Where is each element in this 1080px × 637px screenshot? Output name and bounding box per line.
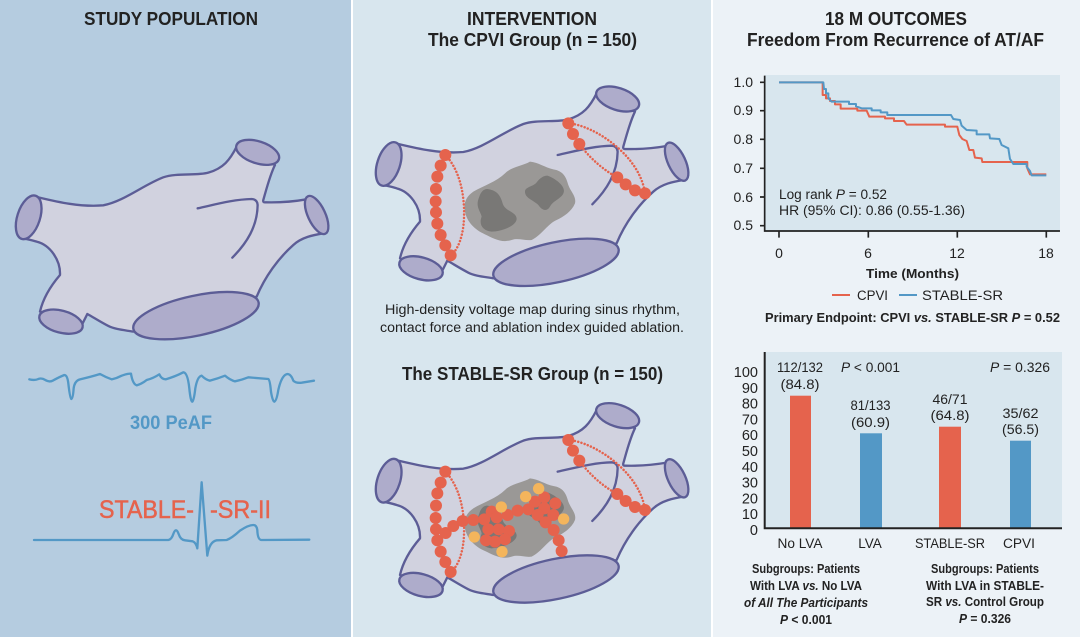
note: LVA vs no LVA: of All The Participants: [744, 595, 868, 610]
caption: voltage map: High-density voltage map during sinus rhythm,: [385, 302, 680, 317]
curve: STABLE-SR: [779, 82, 1046, 175]
bar: No LVA: [777, 359, 823, 528]
legend: STABLE-SR: [922, 288, 1003, 303]
label: STABLE-SR-II: STABLE-: [99, 496, 194, 524]
axes: [760, 76, 1060, 238]
legend: [832, 288, 1003, 303]
y axis labels: 0.8: [734, 131, 753, 147]
note: LVA vs no LVA: P < 0.001: [780, 612, 832, 627]
bar: No LVA: 112/132: [777, 359, 823, 375]
y axis labels: 30: [742, 476, 758, 492]
x axis labels: 0: [775, 245, 783, 261]
bar: LVA: [850, 397, 891, 528]
bar: STABLE-SR: (64.8): [930, 407, 970, 423]
caption: voltage map: [380, 302, 684, 335]
illustration: STABLE-SR ablation: [371, 398, 693, 612]
x axis labels: 12: [949, 245, 965, 261]
primary endpoint note: Primary Endpoint: CPVI vs. STABLE-SR P = 0.52: [765, 310, 1060, 325]
y axis labels: [734, 74, 753, 233]
bar: CPVI: 35/62: [1002, 405, 1039, 421]
y axis labels: 0.9: [734, 102, 753, 118]
caption: voltage map: contact force and ablation index guided ablation.: [380, 320, 684, 335]
category labels: [778, 536, 1035, 551]
heading: STABLE-SR group: The STABLE-SR Group (n = 150): [402, 364, 663, 384]
note: LVA vs no LVA: Subgroups: Patients: [752, 561, 860, 576]
note: STABLE-SR vs control: With LVA in STABLE-: [926, 578, 1044, 593]
log rank statistics: Log rank P = 0.52: [779, 187, 887, 202]
y axis labels: 0.7: [734, 160, 753, 176]
category labels: CPVI: [1003, 536, 1035, 551]
y axis labels: 0.5: [734, 217, 753, 233]
legend: CPVI: [857, 288, 888, 303]
note: STABLE-SR vs control: Subgroups: Patients: [931, 561, 1039, 576]
x axis title: Time (Months): [866, 266, 959, 281]
note: LVA vs no LVA: With LVA vs. No LVA: [750, 578, 863, 593]
note: LVA vs no LVA: [744, 561, 868, 627]
y axis labels: 40: [742, 460, 758, 476]
ablation lesion dots: [430, 117, 651, 261]
y axis labels: 10: [742, 507, 758, 523]
panel: study population: [0, 0, 351, 637]
y axis labels: 50: [742, 444, 758, 460]
label: STABLE-SR-II: -SR-II: [210, 496, 271, 524]
bar: LVA: 81/133: [850, 397, 891, 413]
y axis labels: 90: [742, 381, 758, 397]
y axis labels: 80: [742, 397, 758, 413]
icon: heart atrium: [11, 135, 333, 349]
category labels: LVA: [858, 536, 882, 551]
axes: [765, 352, 1062, 528]
bar: STABLE-SR: 46/71: [932, 391, 968, 407]
label: STABLE-SR-II: [99, 496, 271, 524]
bar: LVA: (60.9): [851, 414, 890, 430]
panel: intervention: [353, 0, 711, 637]
category labels: No LVA: [778, 536, 822, 551]
substrate ablation dots: [430, 434, 651, 578]
p values: P < 0.001: [841, 359, 900, 375]
y axis labels: 100: [734, 365, 758, 381]
ECG trace: atrial fibrillation: [29, 372, 314, 402]
ECG trace: sinus rhythm: [34, 482, 309, 556]
note: STABLE-SR vs control: [926, 561, 1044, 626]
p values: [841, 359, 1050, 375]
panel: outcomes: [713, 0, 1080, 637]
category labels: STABLE-SR: [915, 536, 985, 551]
bar: STABLE-SR: [930, 391, 970, 528]
bar: No LVA: (84.8): [780, 376, 820, 392]
pulmonary vein dotted lines: [445, 440, 645, 572]
y axis labels: 20: [742, 491, 758, 507]
y axis labels: [734, 365, 758, 539]
log rank statistics: [779, 187, 965, 218]
y axis labels: 0.6: [734, 189, 753, 205]
bar: CPVI: (56.5): [1002, 421, 1039, 437]
heading: freedom from recurrence: Freedom From Recurrence of AT/AF: [747, 30, 1044, 50]
chart: subgroup bars: [734, 352, 1062, 551]
y axis labels: 70: [742, 412, 758, 428]
heading: intervention: INTERVENTION: [467, 9, 597, 29]
low voltage area scar: [465, 478, 575, 558]
x axis labels: 6: [864, 245, 872, 261]
chart: Kaplan-Meier curves: [734, 74, 1060, 303]
heading: CPVI group: The CPVI Group (n = 150): [428, 30, 637, 50]
note: STABLE-SR vs control: SR vs. Control Group: [926, 594, 1044, 609]
heading: study population: STUDY POPULATION: [84, 9, 258, 29]
heading: 18 M outcomes: 18 M OUTCOMES: [825, 9, 967, 29]
label: 300 PeAF: 300 PeAF: [130, 413, 212, 434]
note: STABLE-SR vs control: P = 0.326: [959, 611, 1011, 626]
x axis labels: 18: [1038, 245, 1054, 261]
yellow ablation points: [469, 483, 569, 557]
p values: P = 0.326: [990, 359, 1050, 375]
illustration: CPVI ablation: [371, 82, 693, 295]
bar: CPVI: [1002, 405, 1039, 528]
y axis labels: 1.0: [734, 74, 753, 90]
y axis labels: 0: [750, 523, 758, 539]
curve: CPVI: [779, 82, 1046, 174]
x axis labels: [775, 245, 1054, 261]
y axis labels: 60: [742, 428, 758, 444]
log rank statistics: HR (95% CI): 0.86 (0.55-1.36): [779, 203, 965, 218]
pulmonary vein dotted lines: [445, 123, 645, 255]
low voltage area scar: [465, 162, 575, 241]
